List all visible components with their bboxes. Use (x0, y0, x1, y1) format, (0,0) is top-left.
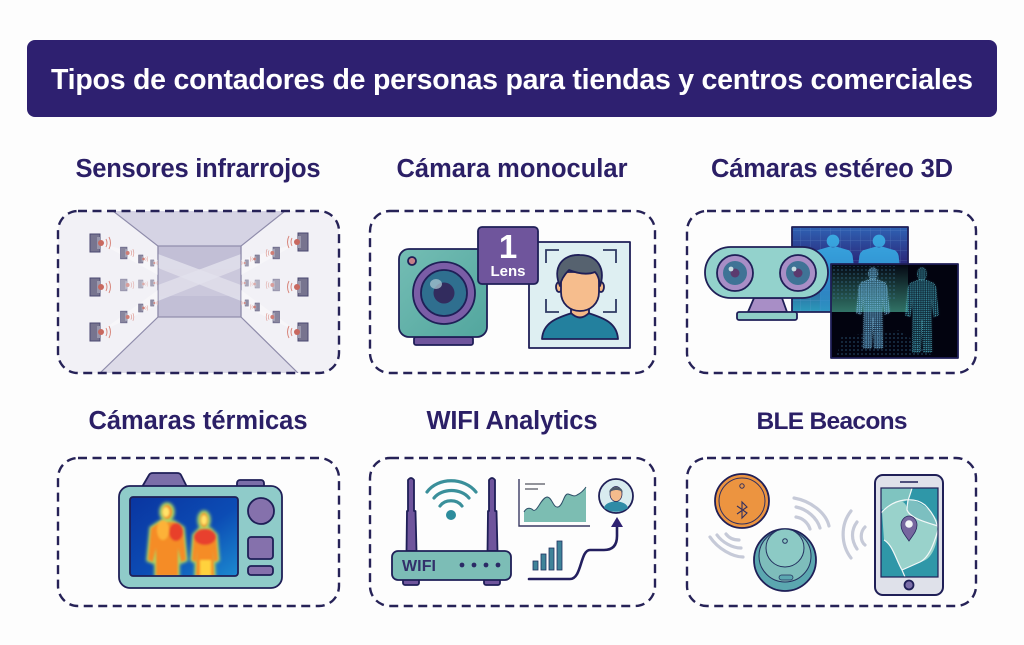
panel: sensores infrarrojos (58, 211, 339, 373)
infrared sensors, left wall (90, 234, 158, 341)
icon: map pin (901, 516, 917, 541)
heading: cámara monocular: Cámara monocular (396, 155, 628, 183)
signal arcs (710, 498, 865, 558)
panel: cámaras térmicas (58, 458, 339, 606)
heading: WIFI Analytics: WIFI Analytics (426, 407, 598, 435)
title bar (27, 40, 997, 117)
badge: 1 Lens: 1 (499, 228, 517, 265)
photo with face detection (529, 242, 630, 348)
icon: wifi signal (427, 481, 476, 520)
map screen (881, 488, 938, 577)
thermal image of two people (130, 497, 238, 576)
area chart (519, 479, 590, 526)
point cloud panel (831, 264, 958, 358)
heading: cámaras estéreo 3D: Cámaras estéreo 3D (711, 155, 953, 183)
depth map with grid (792, 227, 908, 320)
badge: 1 Lens (478, 227, 538, 284)
icon: stereo camera (705, 247, 828, 320)
icon: wifi router: WIFI (402, 558, 436, 575)
icon: thermal camera (119, 473, 282, 588)
heading: cámaras térmicas: Cámaras térmicas (88, 407, 308, 435)
panel: WIFI Analytics (370, 458, 655, 606)
panel: cámaras estéreo 3D (687, 211, 976, 373)
title text: Tipos de contadores de personas para tiendas y centros comerciales (51, 64, 973, 96)
icon: smartphone with map (875, 475, 943, 595)
heading: sensores infrarrojos: Sensores infrarrojos (76, 155, 320, 183)
arrow (529, 517, 623, 579)
heading: BLE Beacons: BLE Beacons (756, 408, 908, 435)
infrared sensors, right wall (241, 233, 308, 341)
icon: teal beacon (754, 529, 816, 591)
badge: 1 Lens: Lens (490, 263, 526, 280)
icon: single-lens camera (399, 249, 487, 345)
icon: wifi router (392, 478, 511, 585)
icon: user avatar (599, 479, 633, 513)
panel: BLE Beacons (687, 458, 976, 606)
icon: orange beacon (715, 474, 769, 528)
bar chart (533, 541, 562, 570)
panel: cámara monocular (370, 211, 655, 373)
